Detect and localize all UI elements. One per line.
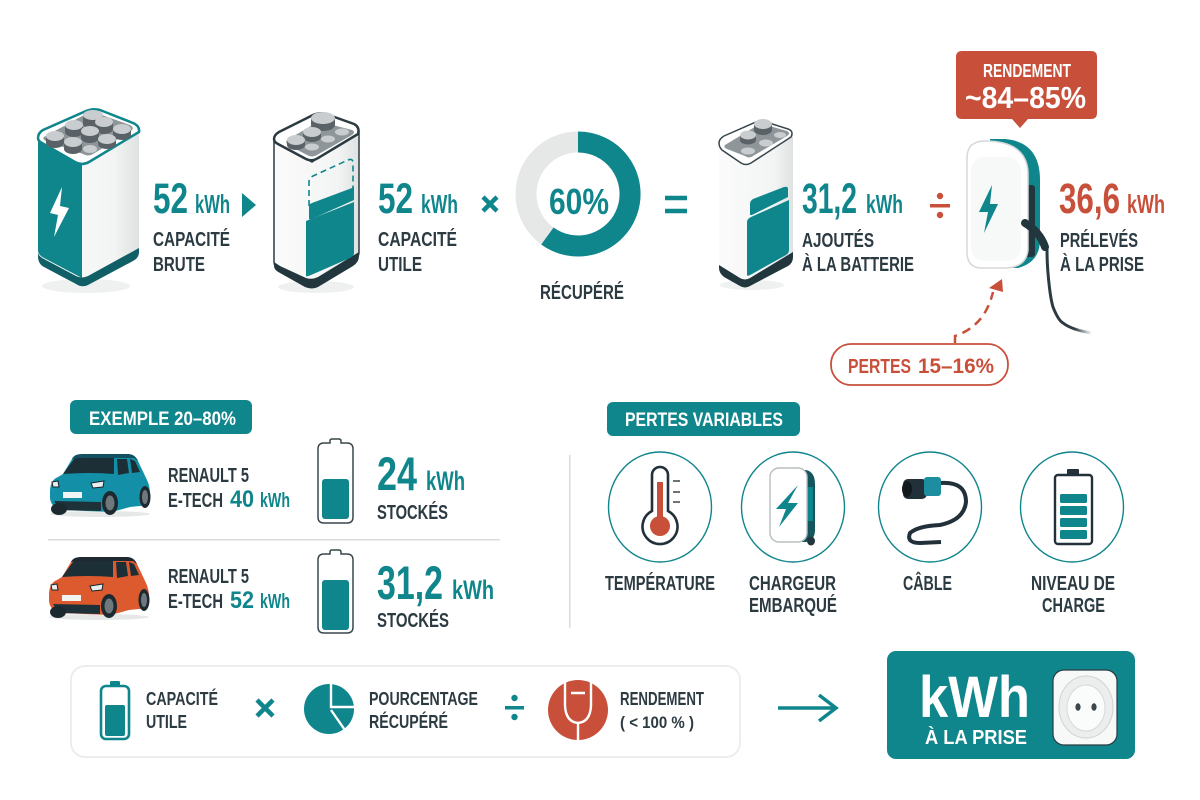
donut chart: 60% recovered: [526, 142, 630, 246]
label: pourcentage récupéré: [369, 689, 478, 732]
operator: multiply: [257, 700, 273, 716]
label: rendement: ( < 100 % ): [620, 713, 694, 732]
value: 52 kWh usable: [378, 175, 458, 223]
value: 52 kWh usable: 52: [378, 175, 413, 223]
label: capacité brute: BRUTE: [153, 254, 205, 276]
value: 24 kWh stored: [377, 447, 465, 524]
label: Renault 5 40 kWh: RENAULT 5: [168, 465, 249, 487]
value: 31,2 kWh stored: kWh: [452, 575, 494, 605]
value: 31,2 kWh stored: [377, 556, 494, 632]
label: rendement: RENDEMENT: [620, 689, 704, 709]
operator: divide: [930, 193, 950, 218]
label: rendement: [620, 689, 704, 732]
icon: battery level 24 kWh: [318, 439, 353, 523]
panel: kWh result: [887, 651, 1135, 759]
label: Renault 5 40 kWh: 40: [230, 486, 254, 513]
label: température: TEMPÉRATURE: [605, 572, 715, 595]
terminals: raw battery: [46, 110, 131, 154]
heading: exemple 20-80%: EXEMPLE 20–80%: [89, 409, 236, 430]
callout: rendement: ~84–85%: [965, 80, 1086, 115]
operator: divide: [505, 695, 524, 720]
label: capacité brute: [153, 228, 230, 276]
label: ajoutés à la batterie: AJOUTÉS: [802, 229, 874, 252]
label: chargeur embarqué: [749, 573, 837, 617]
label: ajoutés à la batterie: [802, 229, 914, 276]
arrow: dashed losses: [955, 279, 1003, 343]
label: Renault 5 52 kWh: 52: [230, 587, 254, 614]
label: chargeur embarqué: CHARGEUR: [749, 573, 836, 595]
label: Renault 5 52 kWh: kWh: [260, 591, 290, 613]
label: récupéré: RÉCUPÉRÉ: [540, 281, 624, 304]
label: pourcentage récupéré: POURCENTAGE: [369, 689, 478, 709]
battery: usable capacity: [274, 112, 359, 293]
label: prélevés à la prise: [1060, 229, 1144, 276]
arrow: to result: [778, 695, 836, 721]
icon: pie: [304, 684, 354, 734]
label: capacité utile: [146, 688, 218, 732]
value: 52 kWh raw: kWh: [195, 189, 230, 219]
pill: pertes: [831, 344, 1008, 385]
icon: efficiency plug: [548, 680, 608, 740]
pill: pertes: 15–16%: [918, 355, 994, 378]
value: 31,2 kWh stored: 31,2: [377, 556, 443, 609]
icon: small battery: [101, 681, 129, 739]
label: câble: CÂBLE: [903, 571, 952, 595]
operator: multiply: [483, 197, 497, 211]
label: ajoutés à la batterie: À LA BATTERIE: [802, 253, 914, 276]
icon: wall charger: [967, 139, 1092, 333]
label: chargeur embarqué: EMBARQUÉ: [749, 594, 837, 617]
icon: thermometer: [608, 452, 712, 562]
label: capacité utile: CAPACITÉ: [146, 688, 218, 709]
value: 52 kWh raw: 52: [153, 175, 188, 223]
donut chart: 60% recovered: 60%: [549, 181, 609, 222]
value: 24 kWh stored: STOCKÉS: [377, 501, 448, 524]
value: 31,2 kWh stored: STOCKÉS: [377, 609, 449, 632]
label: Renault 5 52 kWh: [168, 566, 290, 614]
value: 36,6 kWh drawn: kWh: [1127, 189, 1165, 219]
callout: rendement: RENDEMENT: [983, 61, 1071, 81]
label: Renault 5 40 kWh: kWh: [260, 490, 290, 512]
icon: cable: [878, 452, 982, 562]
label: Renault 5 40 kWh: E-TECH: [168, 490, 223, 512]
value: 52 kWh raw: [153, 175, 230, 223]
label: niveau de charge: [1031, 573, 1115, 617]
label: capacité brute: CAPACITÉ: [153, 228, 230, 251]
value: 31,2 kWh added: kWh: [866, 189, 903, 219]
battery: energy added: [719, 119, 793, 290]
value: 36,6 kWh drawn: 36,6: [1059, 175, 1120, 223]
label: pourcentage récupéré: RÉCUPÉRÉ: [369, 711, 448, 732]
value: 24 kWh stored: 24: [377, 447, 417, 500]
label: niveau de charge: NIVEAU DE: [1031, 573, 1115, 595]
icon: wall socket: [1053, 670, 1117, 745]
label: prélevés à la prise: PRÉLEVÉS: [1060, 229, 1138, 252]
label: capacité utile: UTILE: [146, 712, 187, 732]
operator: equals: [665, 198, 687, 211]
heading: pertes variables: [607, 402, 800, 436]
pill: pertes: PERTES: [848, 356, 911, 378]
value: 31,2 kWh added: 31,2: [802, 175, 857, 223]
label: Renault 5 40 kWh: [168, 465, 290, 513]
label: capacité utile: [378, 228, 457, 276]
panel: formula: [71, 666, 740, 757]
icon: teal car: [50, 454, 150, 517]
label: prélevés à la prise: À LA PRISE: [1060, 253, 1144, 276]
label: niveau de charge: CHARGE: [1042, 595, 1105, 617]
label: capacité utile: CAPACITÉ: [378, 228, 457, 251]
terminals: usable battery: [287, 112, 349, 150]
label: Renault 5 52 kWh: E-TECH: [168, 591, 223, 613]
icon: battery level 31,2 kWh: [318, 550, 353, 633]
value: 52 kWh usable: kWh: [421, 189, 458, 219]
value: 24 kWh stored: kWh: [426, 466, 465, 496]
heading: pertes variables: PERTES VARIABLES: [625, 410, 783, 431]
panel: kWh result: À LA PRISE: [925, 726, 1027, 749]
icon: charge level: [1020, 452, 1124, 562]
arrow: triangle: [242, 193, 256, 217]
panel: kWh result: kWh: [919, 665, 1030, 730]
label: capacité utile: UTILE: [378, 254, 422, 276]
icon: on-board charger: [742, 452, 844, 562]
label: Renault 5 52 kWh: RENAULT 5: [168, 566, 249, 588]
terminals: added battery: [740, 119, 786, 154]
callout: rendement: [956, 51, 1097, 128]
icon: orange car: [49, 557, 150, 620]
battery: raw capacity: [38, 109, 139, 293]
heading: exemple 20-80%: [70, 400, 252, 434]
